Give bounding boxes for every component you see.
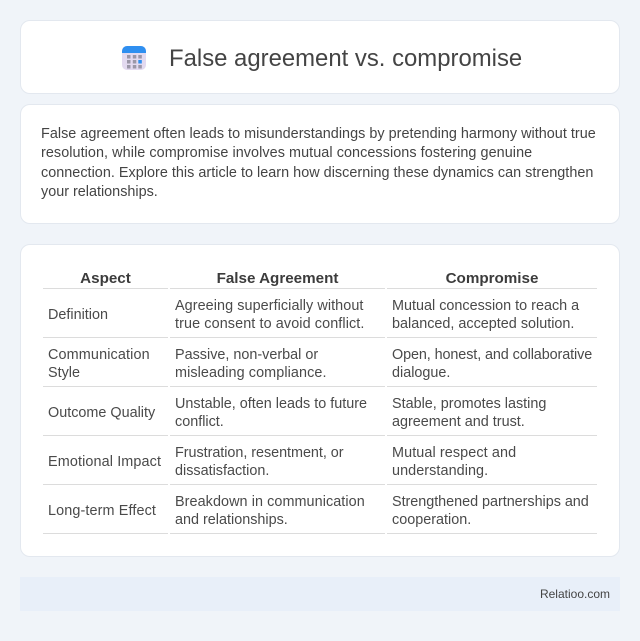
row: communication style: dialogue. (392, 365, 450, 381)
table card (20, 244, 620, 557)
row: communication style: Passive, non-verbal or (175, 347, 318, 363)
intro card (20, 104, 620, 224)
intro text: False agreement often leads to misunderstandings by pretending harmony without true (41, 126, 596, 142)
row: long-term effect: Breakdown in communication (175, 494, 365, 510)
row: outcome quality: Stable, promotes lasting (392, 396, 546, 412)
row: long-term effect: cooperation. (392, 512, 471, 528)
row: definition: Definition (48, 307, 108, 323)
row: long-term effect: Strengthened partnerships and (392, 494, 589, 510)
title card (20, 20, 620, 94)
row: outcome quality: Outcome Quality (48, 405, 155, 421)
row: outcome quality (48, 396, 546, 430)
header row: False Agreement (217, 270, 338, 287)
row: long-term effect (48, 494, 589, 528)
row: emotional impact: Frustration, resentment, or (175, 445, 343, 461)
row: emotional impact: dissatisfaction. (175, 463, 269, 479)
row: communication style: Open, honest, and collaborative (392, 347, 592, 363)
header row: Aspect (80, 270, 131, 287)
row: definition: true consent to avoid conflict. (175, 316, 364, 332)
comparison table (43, 270, 597, 534)
row: communication style: Communication (48, 347, 150, 363)
intro text: connection. Explore this article to learn how discerning these dynamics can strengthen (41, 165, 593, 181)
intro text: resolution, while compromise involves mutual concessions fostering genuine (41, 145, 532, 161)
row: communication style: Style (48, 365, 80, 381)
header row (80, 270, 538, 287)
row: emotional impact: Mutual respect and (392, 445, 516, 461)
intro text: your relationships. (41, 184, 158, 200)
row: definition: Mutual concession to reach a (392, 298, 579, 314)
title: False agreement vs. compromise (169, 45, 522, 72)
row: outcome quality: conflict. (175, 414, 224, 430)
row: outcome quality: Unstable, often leads to future (175, 396, 367, 412)
row: definition: Agreeing superficially without (175, 298, 363, 314)
row: communication style (48, 347, 592, 381)
row: outcome quality: agreement and trust. (392, 414, 525, 430)
row: definition (48, 298, 580, 332)
row: communication style: misleading compliance. (175, 365, 327, 381)
intro text (41, 126, 596, 200)
footer text: Relatioo.com (540, 587, 610, 601)
footer bar (20, 577, 620, 611)
row: definition: balanced, accepted solution. (392, 316, 574, 332)
row: emotional impact: Emotional Impact (48, 454, 161, 470)
header row: Compromise (446, 270, 538, 287)
icon: calendar (122, 46, 146, 70)
row: long-term effect: Long-term Effect (48, 503, 156, 519)
row: long-term effect: and relationships. (175, 512, 288, 528)
row: emotional impact: understanding. (392, 463, 488, 479)
row: emotional impact (48, 445, 516, 479)
